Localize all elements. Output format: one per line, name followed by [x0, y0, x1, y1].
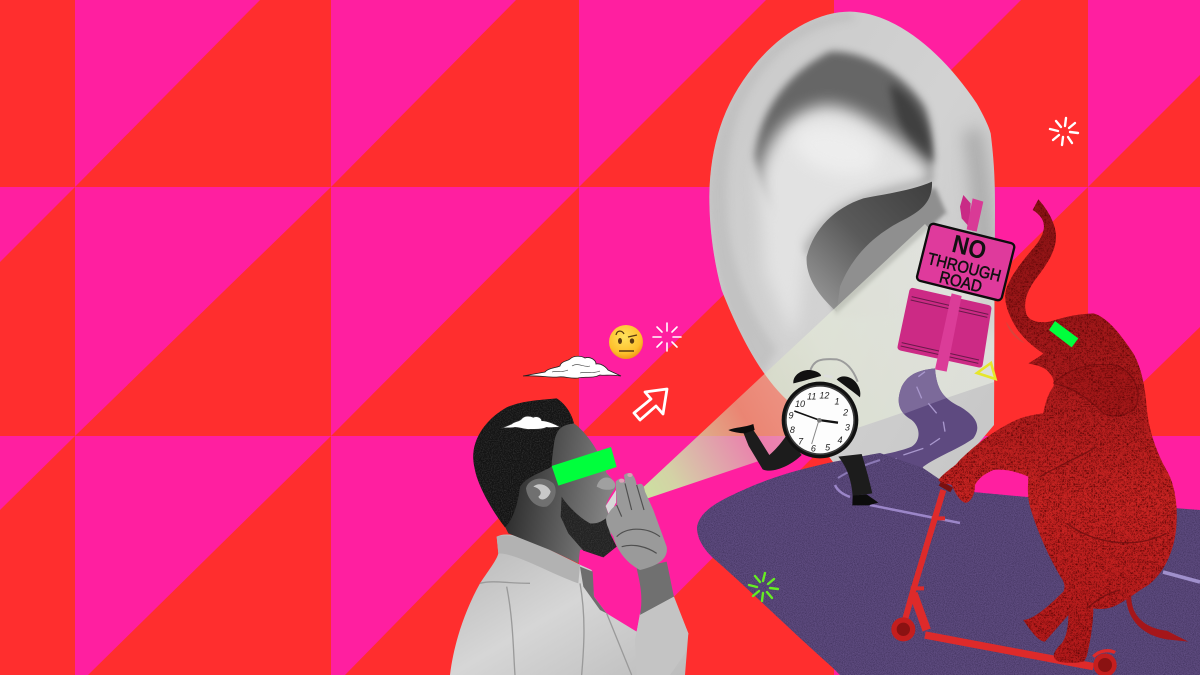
- clock face: 12: [819, 391, 829, 401]
- man's forearm: [637, 562, 674, 615]
- elephant tail: [1126, 590, 1188, 642]
- clock face: 8: [790, 425, 795, 435]
- man's beard: [561, 497, 617, 557]
- clock face: 3: [845, 423, 850, 433]
- man's hair: [473, 398, 574, 527]
- man's cupped hand: [606, 473, 667, 570]
- man shouting: [450, 398, 688, 675]
- man's cuff: [635, 597, 688, 675]
- icon: white sparkle near emoji: [653, 323, 681, 351]
- clock face: 1: [834, 397, 839, 407]
- man's ear: [526, 479, 556, 507]
- clock face: 10: [795, 399, 805, 409]
- elephant on a scooter: [894, 199, 1188, 674]
- icon: outlined arrow: [634, 389, 667, 420]
- clock face: 11: [807, 392, 816, 402]
- running alarm clock: [728, 359, 878, 505]
- clock face: 4: [837, 435, 842, 445]
- icon: yellow triangle: [977, 363, 996, 379]
- clock face: 5: [825, 442, 831, 452]
- elephant body: [938, 199, 1177, 663]
- giant ear: [709, 12, 995, 483]
- man's shirt: [450, 534, 688, 675]
- sign post and arrow top: [960, 195, 983, 232]
- elephant tusk: [1006, 322, 1025, 343]
- road: main asphalt: [697, 453, 1200, 675]
- sound beam from the mouth: [622, 224, 994, 507]
- icon: green sparkle: [749, 573, 778, 601]
- elephant ear flap and body folds: [1040, 364, 1167, 608]
- clock bells and handle: [793, 359, 860, 397]
- front panel of sign: ROAD: [937, 267, 984, 296]
- back panel of sign: [897, 288, 991, 372]
- front panel of sign: NO: [949, 230, 989, 265]
- scooter: [894, 483, 1115, 674]
- clock face: 9: [788, 411, 793, 421]
- road: winding section: [884, 368, 978, 468]
- clock face: 6: [811, 443, 816, 453]
- clock face: [782, 382, 858, 458]
- front panel of sign: [916, 223, 1015, 302]
- icon: raised eyebrow emoji: [609, 325, 643, 359]
- icon: white sparkle top right: [1050, 118, 1078, 145]
- icon: green bar over elephant eye: [1049, 321, 1078, 347]
- clock face: 7: [798, 437, 804, 447]
- icon: large cloud: [523, 356, 621, 378]
- icon: small cloud on head: [501, 416, 561, 429]
- clock legs and shoes: [728, 424, 878, 505]
- clock face: 2: [842, 408, 848, 418]
- man's neck and head: [503, 423, 616, 563]
- icon: green bar over man's eyes: [552, 447, 617, 486]
- front panel of sign: THROUGH: [926, 249, 1003, 286]
- no through road sign: [897, 195, 1015, 372]
